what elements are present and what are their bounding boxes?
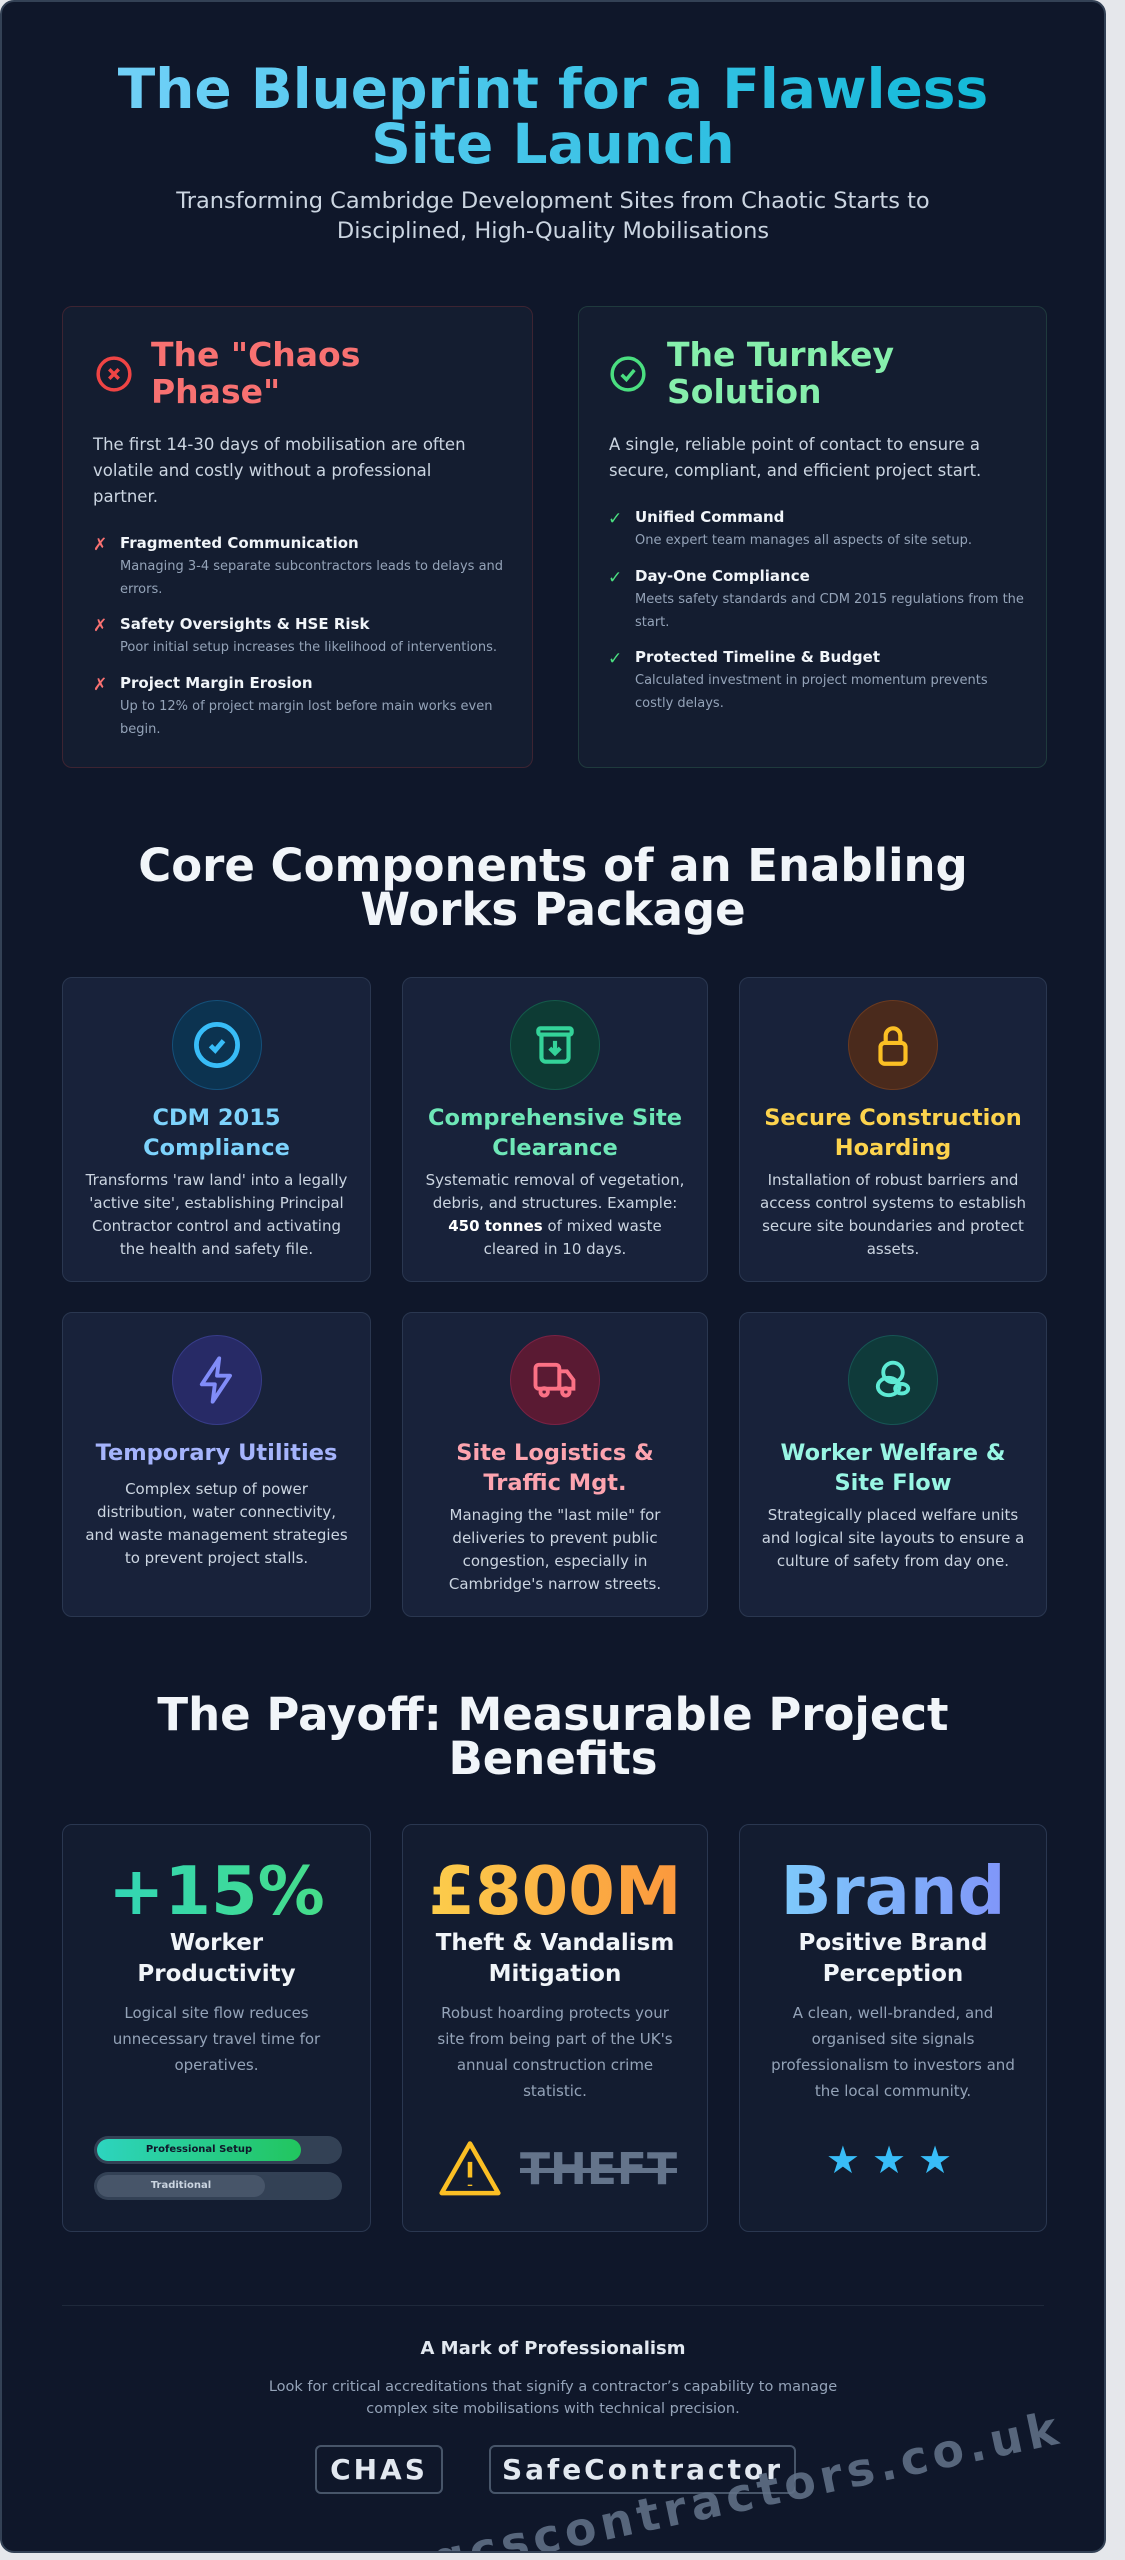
heading (428, 1105, 682, 1161)
heading: payoff (157, 1688, 949, 1785)
text: accreditation: Look for critical accreditations that signify a contractor’s capability to manage complex site mobilisations with technical precision. (269, 2379, 837, 2417)
item: unified (608, 508, 972, 548)
text: chaos intro: The first 14-30 days of mobilisation are often volatile and costly without a professional partner. (93, 435, 466, 506)
bar: professional: Professional Setup (146, 2144, 252, 2155)
heading: payoff: Benefits (448, 1732, 658, 1785)
bar: traditional: Traditional (151, 2180, 211, 2191)
heading: Worker (170, 1930, 263, 1956)
heading: core components (138, 839, 968, 936)
heading: core components: Works Package (360, 883, 746, 936)
badge: CHAS (315, 2445, 443, 2494)
item: unified: Unified Command (635, 508, 784, 526)
panel: chaos phase: ✗ (93, 675, 107, 695)
desc: Logical site flow reduces unnecessary travel time for operatives. (113, 2004, 320, 2074)
item: fragmented: Managing 3-4 separate subcontractors leads to delays and errors. (120, 559, 503, 597)
heading: Temporary Utilities (96, 1440, 337, 1466)
title: The Blueprint for a Flawless (118, 57, 988, 121)
card: theft (402, 1824, 708, 2232)
stat: +15% (108, 1852, 325, 1930)
heading: turnkey: Solution (667, 372, 822, 411)
heading (436, 1930, 674, 1987)
heading: turnkey: The Turnkey (667, 335, 894, 374)
card: productivity (62, 1824, 371, 2232)
stat: £800M (428, 1852, 682, 1930)
item: fragmented (93, 534, 503, 597)
item: margin: Project Margin Erosion (120, 674, 313, 692)
bar chart: setup comparison (94, 2136, 342, 2200)
icon: truck (510, 1335, 600, 1425)
item: timeline: Protected Timeline & Budget (635, 648, 880, 666)
card: hoarding (739, 977, 1047, 1282)
card: utilities (62, 1312, 371, 1617)
card: logistics (402, 1312, 708, 1617)
desc: A clean, well-branded, and organised site signals professionalism to investors and the local community. (771, 2004, 1015, 2100)
heading (799, 1930, 987, 1987)
heading: chaos: Phase" (151, 372, 280, 411)
badge: SafeContractor: SafeContractor (502, 2453, 783, 2486)
heading (143, 1105, 290, 1161)
desc: Managing the "last mile" for deliveries to prevent public congestion, especially in Cambridge's narrow streets. (449, 1506, 661, 1593)
heading: Clearance (492, 1135, 618, 1161)
icon: check (172, 1000, 262, 1090)
heading (137, 1930, 296, 1987)
icon: welfare (848, 1335, 938, 1425)
heading: Secure Construction (764, 1105, 1022, 1131)
panel: turnkey solution: ✓ (608, 568, 622, 588)
subtitle: Transforming Cambridge Development Sites from Chaotic Starts to Disciplined, High-Quality Mobilisations (176, 188, 930, 244)
heading: Site Logistics & (456, 1440, 654, 1466)
desc: Complex setup of power distribution, water connectivity, and waste management strategies to prevent project stalls. (85, 1480, 348, 1567)
heading: CDM 2015 (152, 1105, 281, 1131)
heading: Site Flow (834, 1470, 952, 1496)
heading (456, 1440, 654, 1496)
bar: traditional (94, 2172, 342, 2200)
item: safety: Poor initial setup increases the likelihood of interventions. (120, 640, 497, 655)
card: CDM (62, 977, 371, 1282)
heading (781, 1440, 1005, 1496)
desc: Strategically placed welfare units and logical site layouts to ensure a culture of safety from day one. (762, 1506, 1024, 1570)
desc: Installation of robust barriers and access control systems to establish secure site boundaries and protect assets. (760, 1171, 1026, 1258)
panel: chaos phase: ✗ (93, 535, 107, 555)
desc: Transforms 'raw land' into a legally 'active site', establishing Principal Contractor control and activating the health and safety file. (86, 1171, 347, 1258)
panel: turnkey solution (578, 306, 1047, 768)
item: timeline (608, 648, 988, 711)
heading: core components: Core Components of an Enabling (138, 839, 968, 892)
desc: Robust hoarding protects your site from being part of the UK's annual construction crime statistic. (437, 2004, 673, 2100)
panel: chaos phase (62, 306, 533, 768)
heading: Worker Welfare & (781, 1440, 1005, 1466)
heading: Compliance (143, 1135, 290, 1161)
item: margin: Up to 12% of project margin lost before main works even begin. (120, 699, 492, 737)
item: unified: One expert team manages all aspects of site setup. (635, 533, 972, 548)
item: compliance: Meets safety standards and CDM 2015 regulations from the start. (635, 592, 1024, 630)
stat: Brand (780, 1852, 1005, 1930)
heading: Traffic Mgt. (483, 1470, 627, 1496)
icon: x circle (96, 356, 132, 392)
text: turnkey intro: A single, reliable point of contact to ensure a secure, compliant, and efficient project start. (609, 435, 981, 480)
item: timeline: Calculated investment in project momentum prevents costly delays. (635, 673, 988, 711)
icon: lock (848, 1000, 938, 1090)
heading: Perception (823, 1961, 963, 1987)
heading: turnkey (667, 335, 894, 411)
icon: bin (510, 1000, 600, 1090)
heading: Productivity (137, 1961, 296, 1987)
title (118, 57, 988, 176)
title: Site Launch (371, 112, 735, 176)
badge: SafeContractor (489, 2445, 796, 2494)
panel: turnkey solution: ✓ (608, 649, 622, 669)
item: compliance (608, 567, 1024, 630)
heading: mark of professionalism: A Mark of Professionalism (420, 2338, 686, 2359)
card: clearance (402, 977, 708, 1282)
bar: professional (94, 2136, 342, 2164)
icon: stars: ★★★ (826, 2138, 964, 2182)
list: turnkey benefits (608, 508, 1024, 711)
card: brand (739, 1824, 1047, 2232)
panel: turnkey solution: ✓ (608, 509, 622, 529)
icon: warning with theft (439, 2141, 677, 2196)
badge: CHAS: CHAS (330, 2453, 428, 2486)
heading: Comprehensive Site (428, 1105, 682, 1131)
item: fragmented: Fragmented Communication (120, 534, 359, 552)
icon: check circle (610, 356, 646, 392)
heading: Theft & Vandalism (436, 1930, 674, 1956)
card: welfare (739, 1312, 1047, 1617)
panel: chaos phase: ✗ (93, 616, 107, 636)
heading: chaos (151, 335, 360, 411)
heading: Positive Brand (799, 1930, 987, 1956)
heading: Hoarding (835, 1135, 951, 1161)
icon: bolt (172, 1335, 262, 1425)
heading: payoff: The Payoff: Measurable Project (157, 1688, 949, 1741)
icon: warning with theft: THEFT (520, 2144, 677, 2195)
desc: Systematic removal of vegetation, debris, and structures. Example: 450 tonnes of mixed waste cleared in 10 days. (426, 1171, 684, 1258)
list: chaos risks (93, 534, 503, 737)
divider (62, 2305, 1044, 2306)
item: safety: Safety Oversights & HSE Risk (120, 615, 369, 633)
stat (63, 1851, 370, 1931)
heading (764, 1105, 1022, 1161)
item: safety (93, 615, 497, 655)
item: compliance: Day-One Compliance (635, 567, 810, 585)
heading: chaos: The "Chaos (151, 335, 360, 374)
item: margin (93, 674, 492, 737)
heading: Mitigation (489, 1961, 621, 1987)
